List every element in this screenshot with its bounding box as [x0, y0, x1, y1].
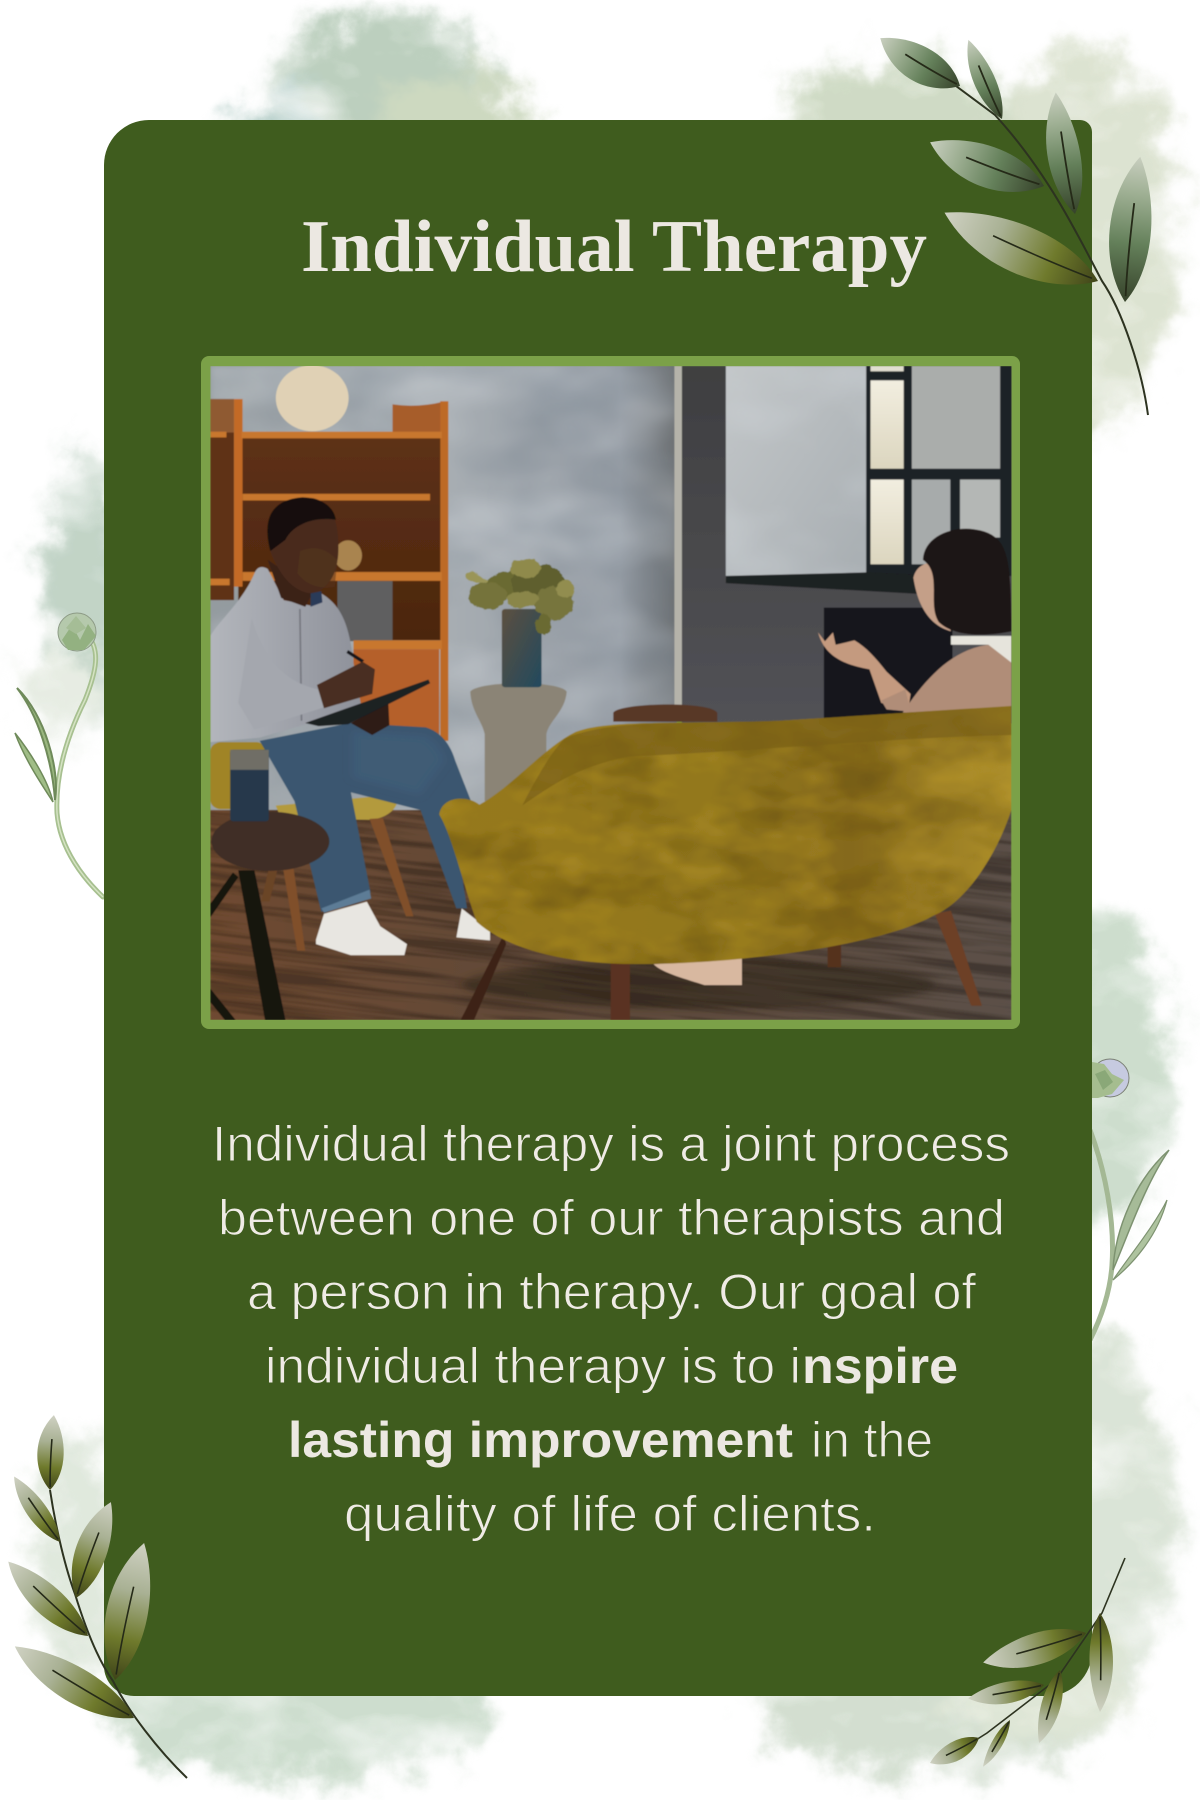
- body paragraph: nspire: [802, 1338, 958, 1394]
- leaf branch: bottom right: [926, 1558, 1125, 1772]
- main green card: [104, 120, 1092, 1696]
- wooden shelf: [210, 399, 448, 741]
- plant on stand: [464, 559, 574, 801]
- body paragraph: in the: [811, 1412, 933, 1468]
- body paragraph: Individual therapy is a joint process: [212, 1116, 1010, 1172]
- body paragraph: between one of our therapists and: [218, 1190, 1005, 1246]
- body paragraph: lasting improvement: [288, 1412, 793, 1468]
- flower: right stem and bud: [1090, 1059, 1169, 1340]
- mustard velvet sofa: [431, 703, 1015, 1020]
- side table with glass: [210, 750, 329, 1020]
- therapy session photo scene: [210, 366, 1012, 1020]
- photo with green frame: [201, 356, 1020, 1029]
- woman seated on sofa: [653, 529, 1011, 985]
- body paragraph: individual therapy is to i: [265, 1338, 801, 1394]
- round sculpture: [276, 365, 349, 431]
- title: Individual Therapy: [301, 206, 927, 288]
- flower: left stem and bud: [15, 613, 103, 897]
- body paragraph: a person in therapy. Our goal of: [247, 1264, 976, 1320]
- leaf branch: bottom left: [0, 1414, 187, 1778]
- leaf branch: top right: [870, 24, 1159, 415]
- body paragraph: [212, 1116, 1010, 1542]
- body paragraph: quality of life of clients.: [344, 1486, 876, 1542]
- man seated with clipboard: [210, 497, 490, 955]
